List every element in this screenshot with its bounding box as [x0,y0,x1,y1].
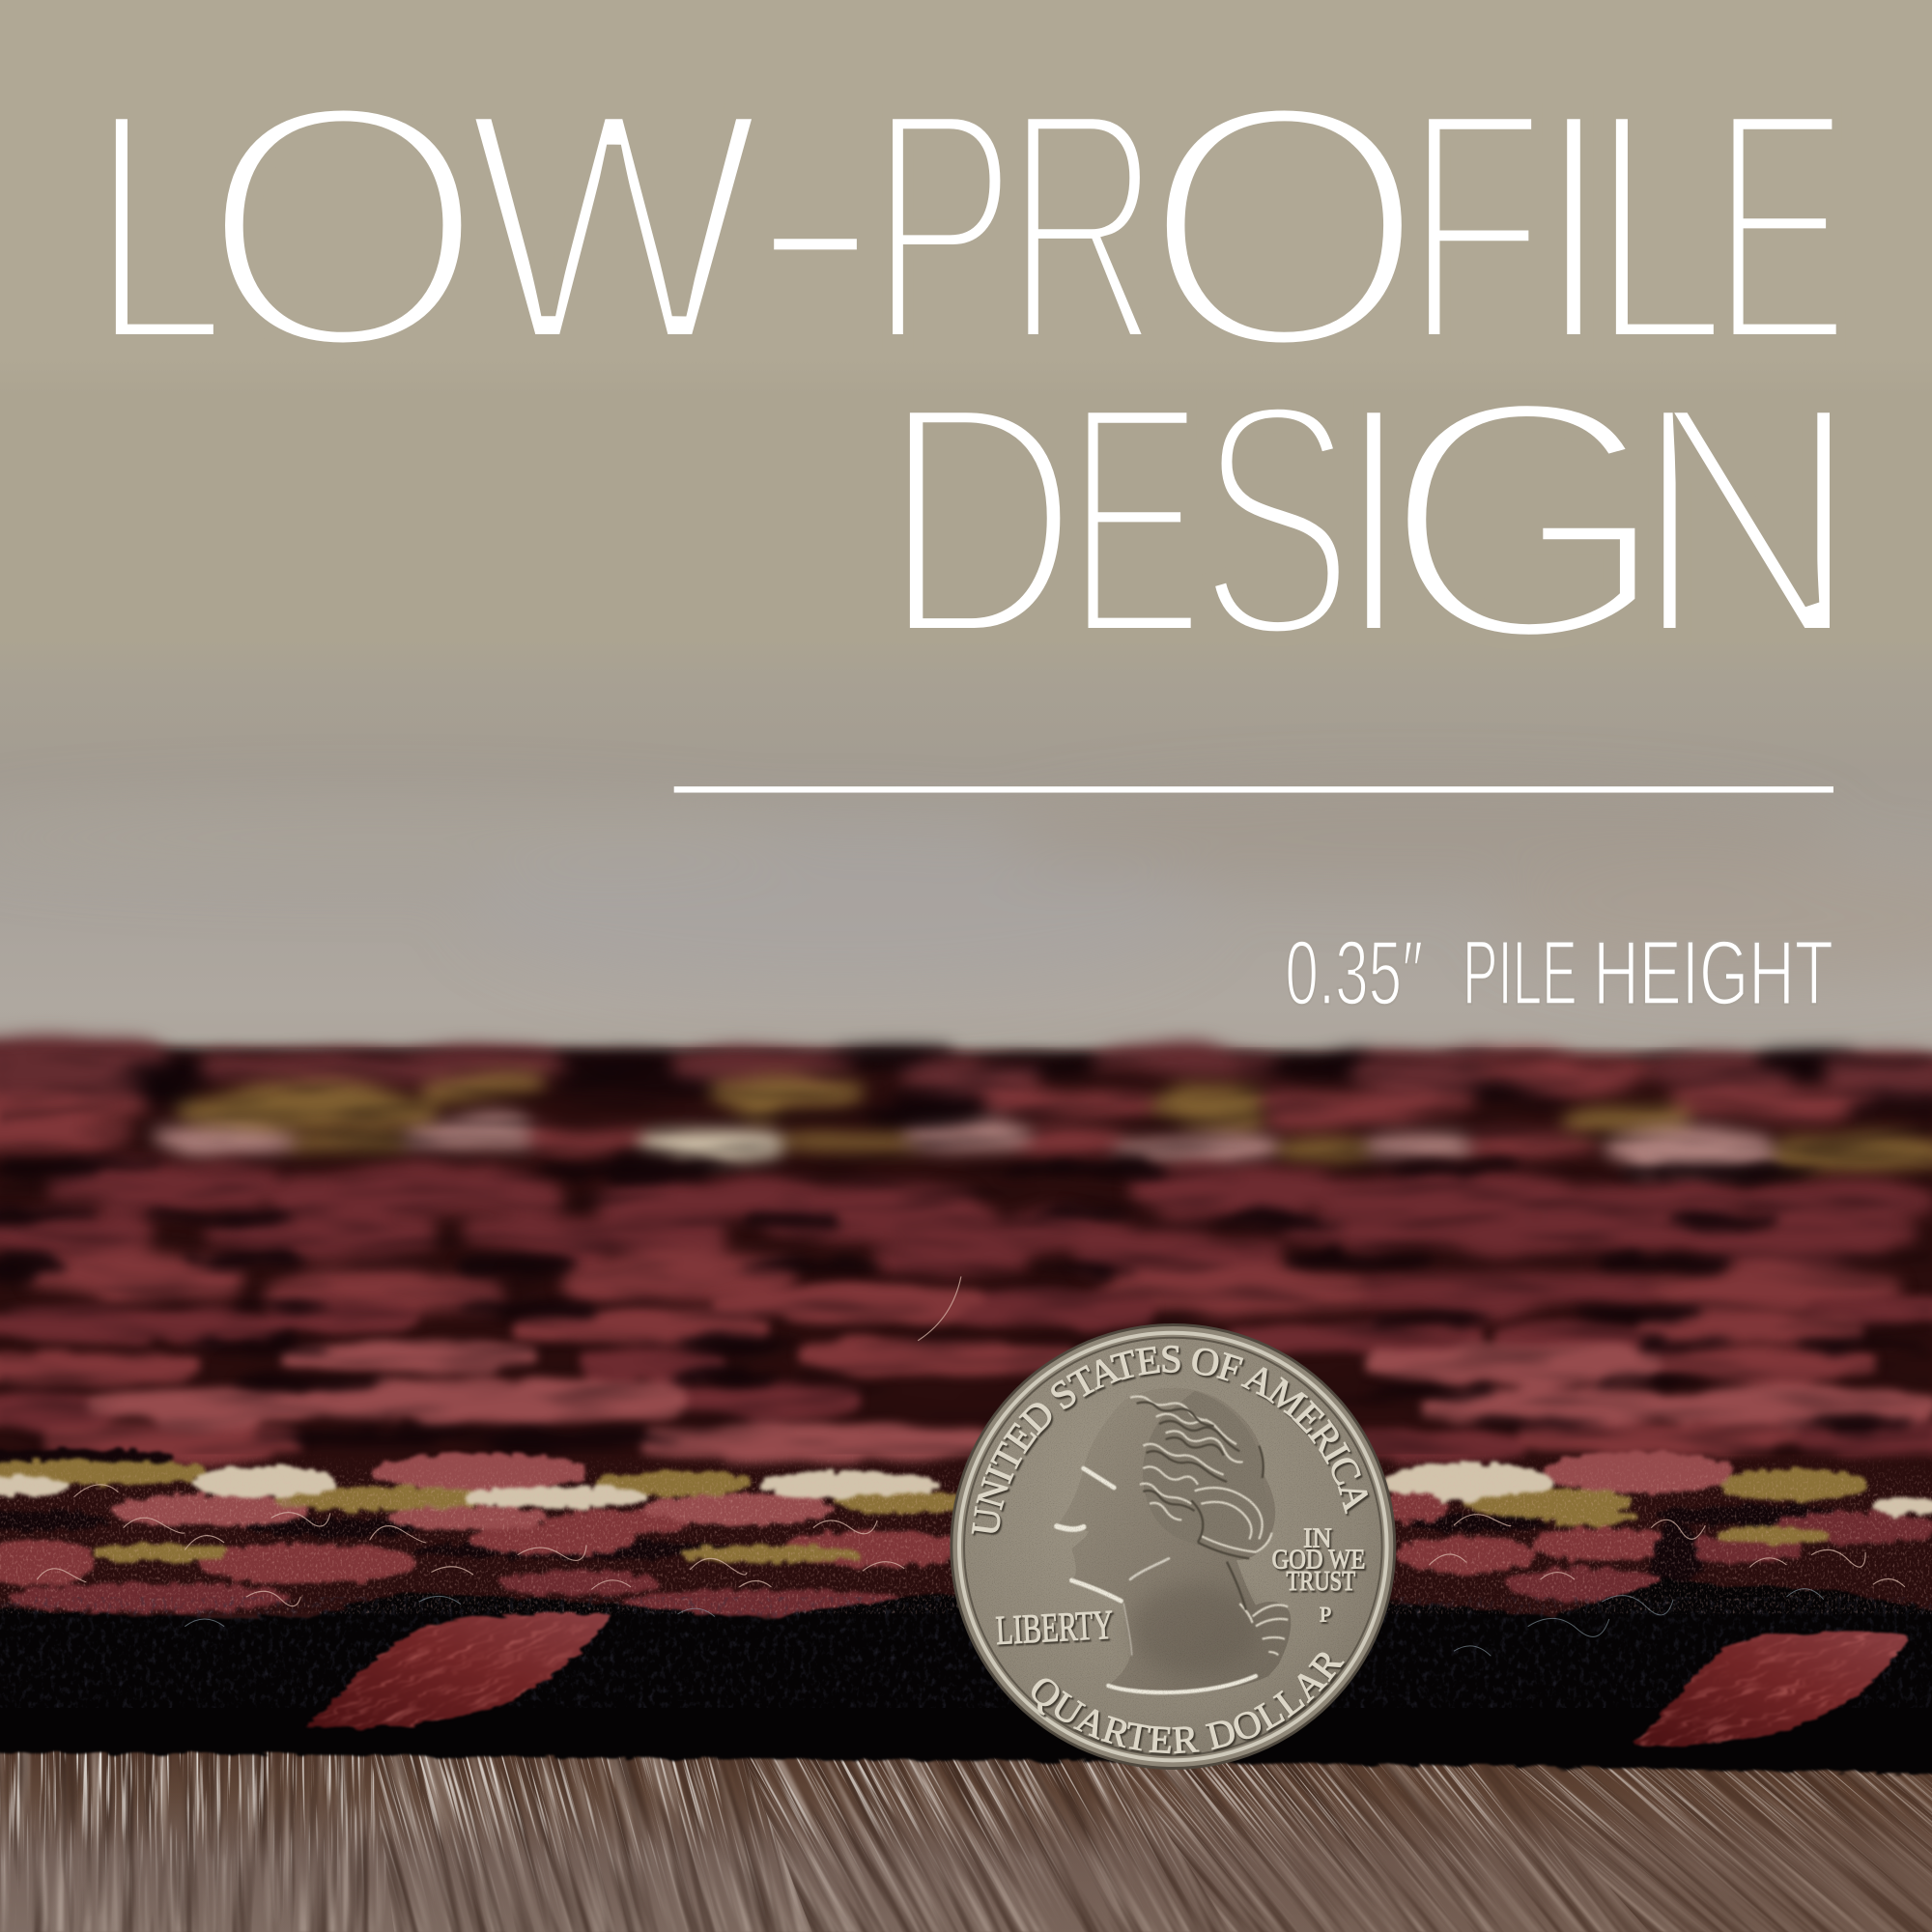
coin motto: IN [1303,1524,1332,1554]
near rug rows [0,1290,1932,1457]
coin bust highlights [1057,1468,1256,1692]
coin disc [950,1323,1396,1770]
subheading: pile height: PILE [1463,923,1577,1025]
title line 1 [90,30,1849,422]
coin surface grain [963,1336,1384,1758]
subheading: pile height: HEIGHT [1593,923,1833,1025]
coin lettering [972,1345,1370,1756]
title line 2: S [1198,332,1354,707]
title line 1: E [1712,39,1849,413]
rug [0,1023,1932,1777]
coin legend bottom: QUARTER DOLLAR [1032,1652,1347,1756]
title line 1: - [746,30,885,405]
title [90,30,1863,712]
wood floor [0,1744,1932,1932]
title line 2: I [1335,332,1412,707]
title line 2 [881,327,1863,712]
mottling on rug [0,1047,1932,1454]
title line 1: P [869,39,1016,413]
title line 1: L [90,39,227,413]
yarn fibres [0,1452,1932,1614]
title line 1: I [1534,39,1612,413]
title line 1: O [1141,30,1428,422]
title line 1: L [1590,39,1728,413]
coin bust of Washington [1057,1388,1291,1694]
rug base [0,1047,1932,1627]
title line 2: D [881,332,1080,707]
coin word Liberty: LIBERTY [995,1603,1115,1654]
subheading: pile height: 0.35″ [1285,923,1423,1025]
coin motto: TRUST [1286,1567,1355,1597]
red twist left [305,1610,612,1731]
front border rows [0,1452,1932,1614]
far rug rows [0,1046,1932,1167]
red twist right [1633,1630,1909,1748]
dark gaps between rug stitches [0,1158,1922,1448]
divider rule [674,786,1833,793]
title line 1: W [465,39,762,413]
title line 1: F [1405,39,1546,413]
black rug edge [0,1579,1932,1775]
middle rug rows [0,1164,1928,1310]
title line 1: O [199,30,488,422]
title line 1: R [1006,39,1160,413]
title line 2: N [1630,332,1863,707]
title line 2: G [1380,327,1671,712]
title line 2: E [1066,332,1205,707]
coin mint mark: P [1320,1602,1331,1626]
quarter coin [950,1323,1397,1770]
coin legend top: UNITED STATES OF AMERICA [972,1345,1370,1536]
coin hair curls [1130,1397,1288,1655]
coin motto: GOD WE [1272,1545,1365,1575]
